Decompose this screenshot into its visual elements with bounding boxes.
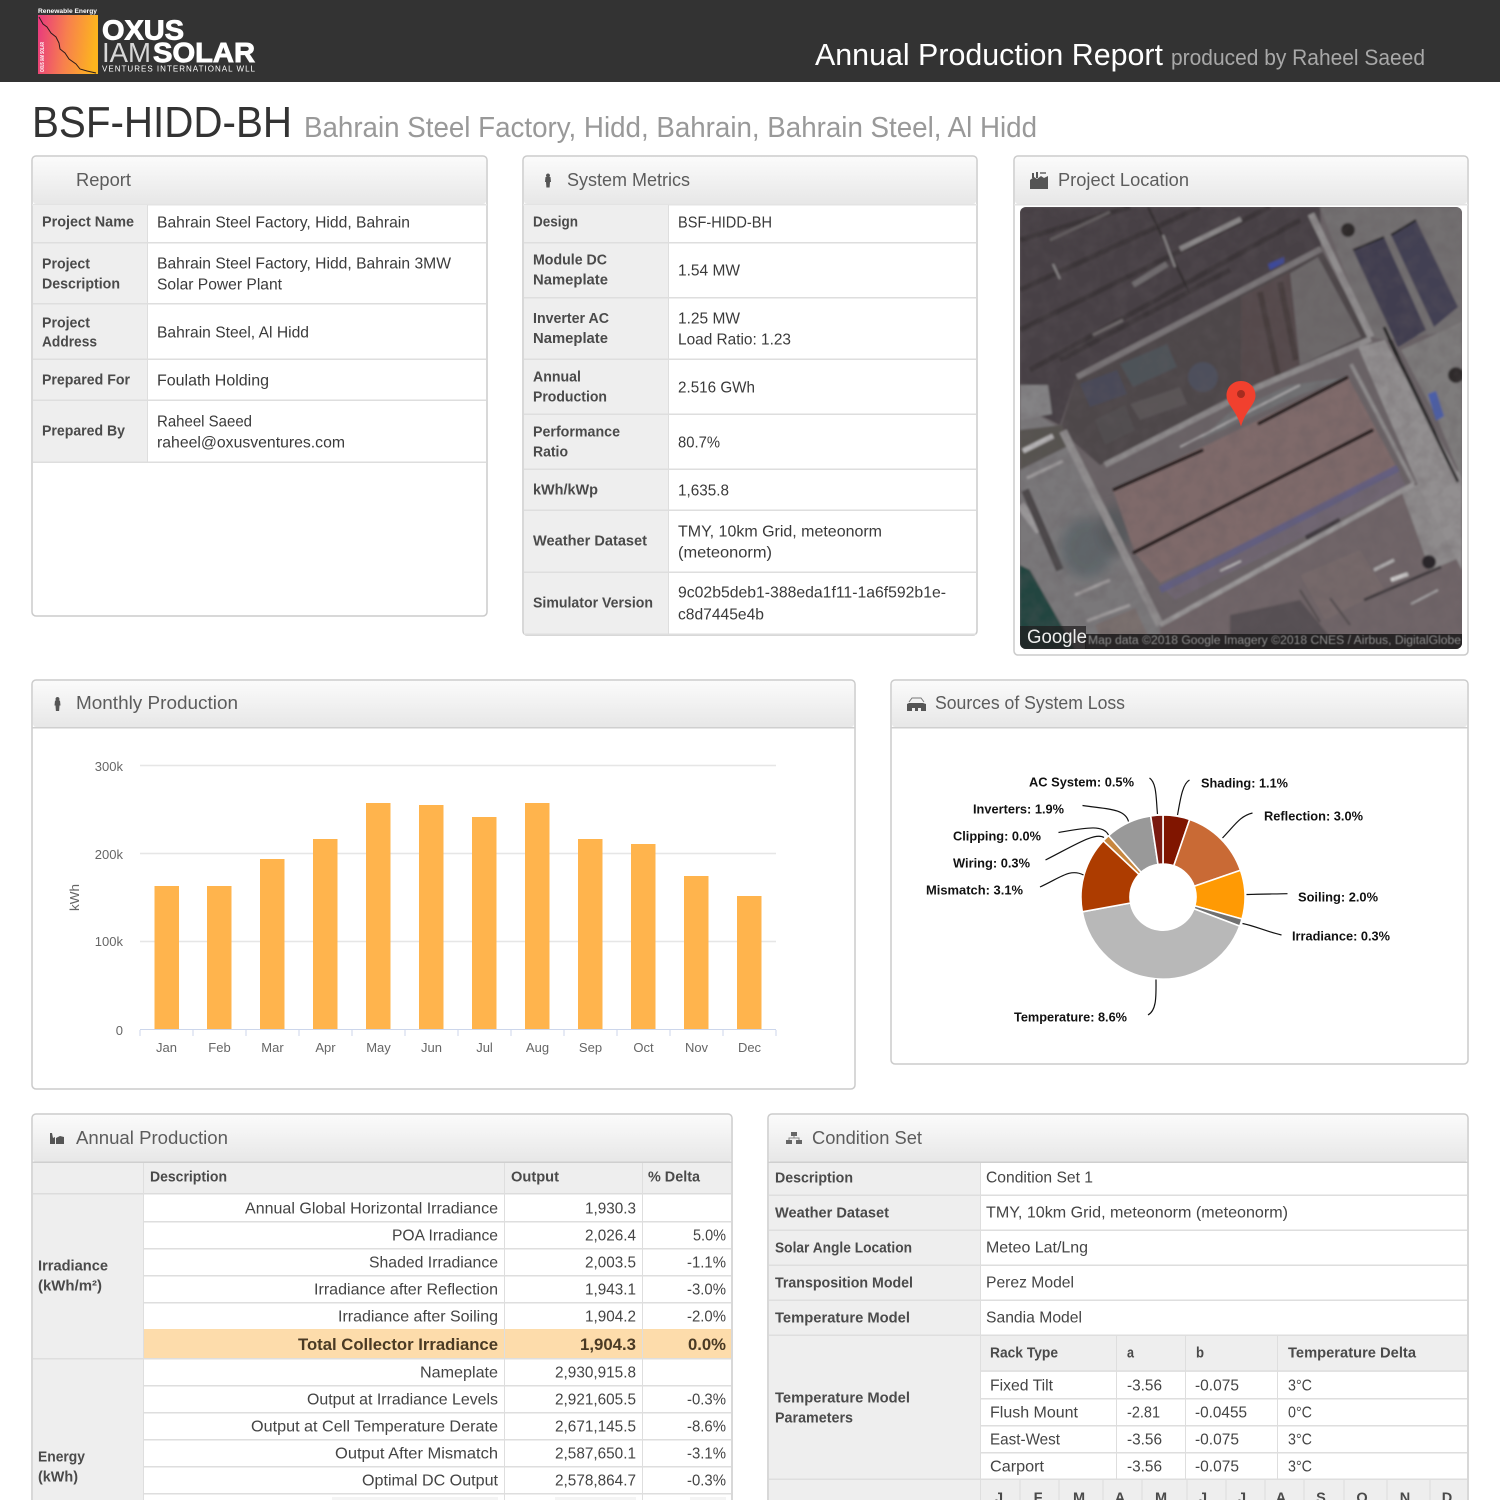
bar chart: 0 xyxy=(116,1023,123,1038)
panel: report: Address xyxy=(42,335,97,351)
panel: annual production: Irradiance after Soiling xyxy=(338,1308,498,1325)
map pin xyxy=(1226,381,1256,426)
table header: % Delta xyxy=(648,1170,701,1186)
report title: Annual Production Report xyxy=(815,37,1163,72)
pie labels: AC System: 0.5% xyxy=(1029,776,1134,790)
bar chart: Oct xyxy=(633,1040,654,1055)
bar chart xyxy=(67,759,776,1055)
temperature parameters table: -0.075 xyxy=(1195,1377,1239,1394)
panel: annual production: Optimal DC Output xyxy=(362,1472,499,1489)
satellite map xyxy=(1020,207,1464,649)
panel: condition set: Condition Set xyxy=(812,1128,922,1148)
panel: condition set: Weather Dataset xyxy=(775,1206,889,1222)
panel: annual production: 1,904.2 xyxy=(585,1308,636,1325)
panel: annual production: Annual Production xyxy=(76,1128,228,1148)
panel: report: Report xyxy=(76,170,131,190)
panel: system metrics: Simulator Version xyxy=(533,596,653,612)
bar chart: Dec xyxy=(738,1040,762,1055)
pie labels: Shading: 1.1% xyxy=(1201,776,1288,790)
panel: report xyxy=(32,156,487,616)
panel: annual production: 2,921,605.5 xyxy=(555,1391,636,1408)
panel: report: Bahrain Steel Factory, Hidd, Bahrain 3MW xyxy=(157,255,452,272)
bar chart: May xyxy=(366,1040,391,1055)
panel: annual production: -0.3% xyxy=(687,1472,726,1489)
panel: annual production: 5.0% xyxy=(693,1227,726,1244)
panel: annual production: (kWh) xyxy=(38,1470,78,1486)
panel: monthly production xyxy=(32,680,855,1089)
panel: condition set xyxy=(768,1114,1468,1500)
panel: project location xyxy=(1014,156,1468,655)
panel: condition set: Solar Angle Location xyxy=(775,1241,912,1257)
bar chart: 100k xyxy=(95,934,123,949)
panel: system metrics: System Metrics xyxy=(567,170,690,190)
panel: annual production: Irradiance xyxy=(38,1259,108,1275)
temperature parameters table: -2.81 xyxy=(1127,1404,1160,1421)
panel: condition set: Transposition Model xyxy=(775,1276,913,1292)
panel: annual production: 2,930,915.8 xyxy=(555,1364,636,1381)
panel: project location: Project Location xyxy=(1058,170,1189,190)
temperature parameters table: -0.0455 xyxy=(1195,1404,1247,1421)
panel: system metrics: TMY, 10km Grid, meteonorm xyxy=(678,523,882,540)
cropped next row xyxy=(332,1497,726,1500)
bar chart: Apr xyxy=(315,1040,336,1055)
panel: report: Description xyxy=(42,277,120,293)
panel: annual production: (kWh/m²) xyxy=(38,1279,102,1295)
panel: annual production: 2,587,650.1 xyxy=(555,1445,636,1462)
temperature parameters table: a xyxy=(1127,1346,1135,1362)
panel: monthly production: Monthly Production xyxy=(76,693,238,713)
report author: produced by Raheel Saeed xyxy=(1171,45,1425,70)
panel: annual production: 1,904.3 xyxy=(580,1335,636,1354)
logo: IAM xyxy=(102,37,151,68)
panel: condition set: TMY, 10km Grid, meteonorm (meteonorm) xyxy=(986,1204,1288,1221)
bar chart: Jun xyxy=(421,1040,442,1055)
panel: system metrics: c8d7445e4b xyxy=(678,606,764,623)
icon: network xyxy=(786,1132,802,1144)
pie labels: Soiling: 2.0% xyxy=(1298,890,1378,904)
panel: annual production: Output at Cell Temperature Derate xyxy=(251,1418,498,1435)
panel: annual production: 1,943.1 xyxy=(585,1281,636,1298)
pie labels: Inverters: 1.9% xyxy=(973,802,1064,816)
panel: system metrics: 1.25 MW xyxy=(678,310,741,327)
temperature parameters table: Temperature Delta xyxy=(1288,1346,1417,1362)
bar chart: kWh xyxy=(67,884,82,911)
panel: annual production: POA Irradiance xyxy=(392,1227,498,1244)
temperature parameters table: Flush Mount xyxy=(990,1404,1079,1421)
bar chart: Jan xyxy=(156,1040,177,1055)
panel: report: Project xyxy=(42,316,90,332)
temperature parameters table: 3°C xyxy=(1288,1377,1312,1394)
panel: condition set: Meteo Lat/Lng xyxy=(986,1239,1088,1256)
satellite map: Google xyxy=(1027,627,1087,648)
bar chart: Aug xyxy=(526,1040,549,1055)
panel: report: Project xyxy=(42,257,90,273)
panel: annual production: 0.0% xyxy=(688,1335,726,1354)
panel: system metrics: Annual xyxy=(533,370,581,386)
panel: system metrics: 9c02b5deb1-388eda1f11-1a6f592b1e- xyxy=(678,584,946,601)
panel: annual production: -1.1% xyxy=(687,1254,726,1271)
panel: annual production: -8.6% xyxy=(687,1418,726,1435)
panel: report: Raheel Saeed xyxy=(157,413,252,430)
temperature parameters table: 3°C xyxy=(1288,1458,1312,1475)
monthly soiling header xyxy=(981,1480,1467,1500)
panel: system metrics: 80.7% xyxy=(678,434,720,451)
panel: system metrics: Ratio xyxy=(533,445,568,461)
temperature parameters table: 3°C xyxy=(1288,1431,1312,1448)
temperature parameters table: -0.075 xyxy=(1195,1431,1239,1448)
logo xyxy=(38,9,256,74)
panel: system metrics: 1,635.8 xyxy=(678,482,729,499)
panel: condition set: Temperature Model xyxy=(775,1391,910,1407)
table header: Output xyxy=(511,1170,559,1186)
pie labels: Reflection: 3.0% xyxy=(1264,810,1363,824)
panel: condition set: Temperature Model xyxy=(775,1311,910,1327)
panel: report: Prepared For xyxy=(42,373,130,389)
panel: report: Prepared By xyxy=(42,424,125,440)
panel: condition set: Perez Model xyxy=(986,1274,1074,1291)
panel: system metrics: Nameplate xyxy=(533,331,608,347)
panel: annual production: 2,578,864.7 xyxy=(555,1472,636,1489)
panel: report: Bahrain Steel, Al Hidd xyxy=(157,324,309,341)
temperature parameters table: -0.075 xyxy=(1195,1458,1239,1475)
bar chart: Sep xyxy=(579,1040,602,1055)
table header xyxy=(33,1163,731,1500)
panel: system metrics: kWh/kWp xyxy=(533,483,598,499)
panel: sources of system loss xyxy=(891,680,1468,1064)
bar chart: Nov xyxy=(685,1040,709,1055)
temperature parameters table: -3.56 xyxy=(1127,1377,1162,1394)
icon: factory xyxy=(1030,172,1048,189)
panel: annual production: Shaded Irradiance xyxy=(369,1254,498,1271)
panel: condition set: Description xyxy=(775,1171,853,1187)
leader lines xyxy=(1040,778,1288,1015)
bar chart: 300k xyxy=(95,759,123,774)
panel: system metrics: Module DC xyxy=(533,253,608,269)
panel: system metrics: Inverter AC xyxy=(533,311,610,327)
bar chart: Mar xyxy=(261,1040,284,1055)
temperature parameters table: 0°C xyxy=(1288,1404,1312,1421)
pie labels: Wiring: 0.3% xyxy=(953,856,1030,870)
panel: annual production: Output After Mismatch xyxy=(335,1445,498,1462)
panel: condition set: Parameters xyxy=(775,1411,853,1427)
temperature parameters table: Fixed Tilt xyxy=(990,1377,1054,1394)
temperature parameters table: -3.56 xyxy=(1127,1431,1162,1448)
panel: annual production: Total Collector Irradiance xyxy=(298,1335,498,1354)
page title: Bahrain Steel Factory, Hidd, Bahrain, Bahrain Steel, Al Hidd xyxy=(304,112,1037,144)
temperature parameters table xyxy=(981,1336,1467,1479)
temperature parameters table: b xyxy=(1196,1346,1204,1362)
panel: sources of system loss: Sources of System Loss xyxy=(935,693,1125,713)
panel: report: Foulath Holding xyxy=(157,372,269,389)
bar chart: 200k xyxy=(95,847,123,862)
panel: annual production: 2,671,145.5 xyxy=(555,1418,636,1435)
panel: system metrics: Production xyxy=(533,390,607,406)
panel: report: Project Name xyxy=(42,215,134,231)
panel: annual production: Nameplate xyxy=(420,1364,498,1381)
pie labels xyxy=(926,776,1390,1024)
logo: VENTURES INTERNATIONAL WLL xyxy=(102,64,256,74)
logo: OXUS IAM SOLAR xyxy=(40,42,46,72)
table header: Description xyxy=(150,1170,227,1186)
logo: SOLAR xyxy=(153,37,255,68)
panel: report: Bahrain Steel Factory, Hidd, Bahrain xyxy=(157,214,410,231)
panel: system metrics: 1.54 MW xyxy=(678,262,741,279)
panel: system metrics: Weather Dataset xyxy=(533,534,647,550)
panel: annual production: -0.3% xyxy=(687,1391,726,1408)
bar chart: Jul xyxy=(476,1040,493,1055)
panel: annual production: Output at Irradiance Levels xyxy=(307,1391,498,1408)
logo: OXUS xyxy=(102,14,184,46)
panel: system metrics: Load Ratio: 1.23 xyxy=(678,331,791,348)
panel: system metrics: (meteonorm) xyxy=(678,544,772,561)
header bar xyxy=(0,0,1500,82)
panel: system metrics xyxy=(523,156,977,635)
temperature parameters table: Rack Type xyxy=(990,1346,1058,1362)
icon: person xyxy=(54,697,60,711)
panel: system metrics: Performance xyxy=(533,425,620,441)
temperature parameters table: -3.56 xyxy=(1127,1458,1162,1475)
logo: Renewable Energy xyxy=(38,9,98,15)
temperature parameters table: East-West xyxy=(990,1431,1061,1448)
satellite map: Map data ©2018 Google Imagery ©2018 CNES / Airbus, DigitalGlobe xyxy=(1088,635,1461,647)
panel: system metrics: Design xyxy=(533,215,578,231)
icon: factory small xyxy=(50,1133,64,1144)
panel: annual production: 2,003.5 xyxy=(585,1254,636,1271)
panel: system metrics: BSF-HIDD-BH xyxy=(678,214,772,231)
pie labels: Mismatch: 3.1% xyxy=(926,884,1023,898)
panel: condition set: Condition Set 1 xyxy=(986,1169,1093,1186)
panel: system metrics: 2.516 GWh xyxy=(678,379,755,396)
panel: annual production: -2.0% xyxy=(687,1308,726,1325)
panel: condition set: Sandia Model xyxy=(986,1309,1082,1326)
icon: person xyxy=(545,174,551,188)
panel: annual production xyxy=(32,1114,732,1500)
panel: annual production: -3.1% xyxy=(687,1445,726,1462)
roof seams xyxy=(1113,377,1373,553)
panel: annual production: Annual Global Horizontal Irradiance xyxy=(245,1200,498,1217)
pie labels: Irradiance: 0.3% xyxy=(1292,930,1390,944)
pie labels: Temperature: 8.6% xyxy=(1014,1010,1127,1024)
panel: annual production: Irradiance after Reflection xyxy=(314,1281,498,1298)
panel: annual production: -3.0% xyxy=(687,1281,726,1298)
icon: solar plant xyxy=(907,698,926,711)
panel: annual production: 1,930.3 xyxy=(585,1200,636,1217)
highlighted row xyxy=(143,1329,731,1358)
panel: annual production: Energy xyxy=(38,1450,85,1466)
panel: report: raheel@oxusventures.com xyxy=(157,434,345,451)
panel: annual production: 2,026.4 xyxy=(585,1227,636,1244)
donut chart xyxy=(1081,815,1245,979)
panel: system metrics: Nameplate xyxy=(533,273,608,289)
temperature parameters table: Carport xyxy=(990,1458,1045,1475)
panel: report: Solar Power Plant xyxy=(157,276,283,293)
bar chart: Feb xyxy=(208,1040,231,1055)
page title xyxy=(32,98,1037,147)
page title: BSF-HIDD-BH xyxy=(32,98,292,147)
pie labels: Clipping: 0.0% xyxy=(953,830,1041,844)
